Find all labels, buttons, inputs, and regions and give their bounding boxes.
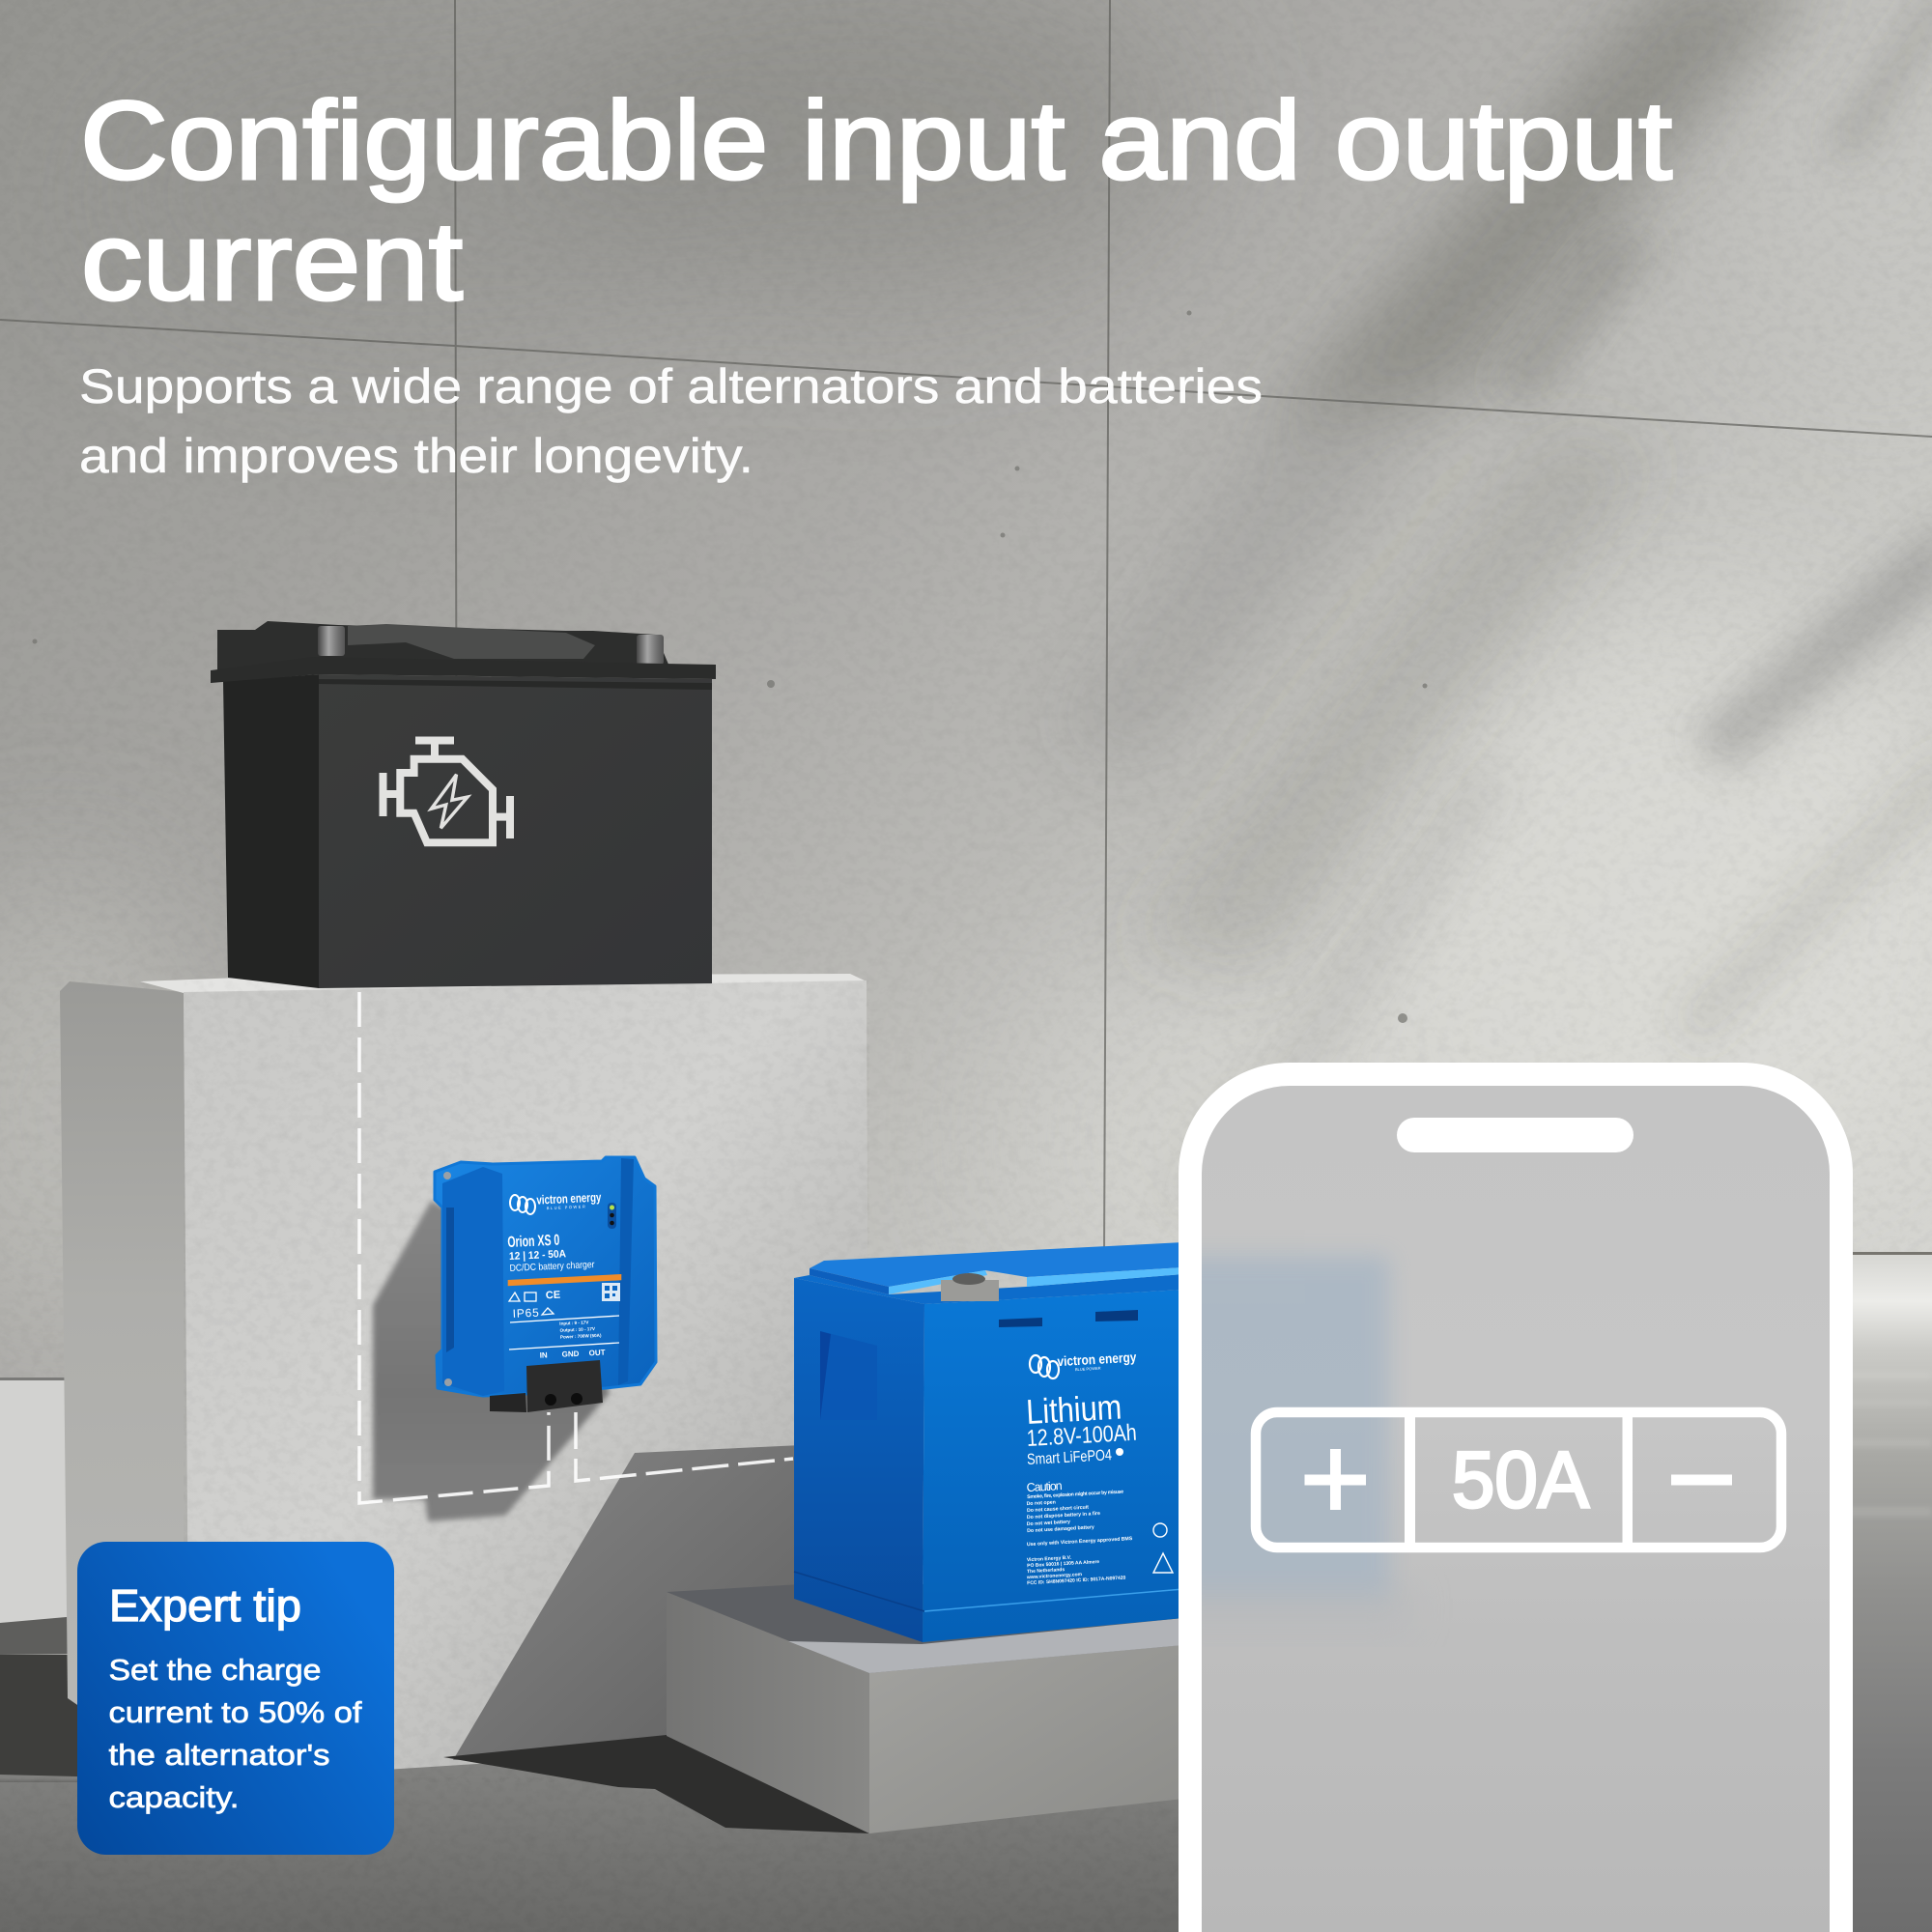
current value: 50A: [1452, 1435, 1590, 1524]
step top: [667, 1584, 1183, 1673]
terminal: [941, 1273, 999, 1301]
base lines: [924, 1589, 1183, 1611]
lithium labels: PO Box 50016 | 1305 AA Almere: [1027, 1559, 1100, 1569]
lid highlights: [889, 1270, 987, 1294]
title: Configurable input and output: [80, 79, 1672, 203]
concrete texture: [0, 0, 1932, 1391]
subtitle: Supports a wide range of alternators and batteries: [79, 359, 1263, 413]
charger labels: [505, 1190, 609, 1361]
car starter battery: [211, 621, 716, 988]
lithium labels: Victron Energy B.V.: [1027, 1555, 1072, 1563]
phone mockup: [1159, 1074, 1841, 1932]
lithium battery left side: [794, 1278, 924, 1642]
battery rim: [794, 1274, 1183, 1304]
lithium labels: FCC ID: SH8N097420 IC ID: 9017A-N097420: [1027, 1576, 1126, 1586]
battery top mouldings: [217, 621, 669, 671]
charger labels: IN: [540, 1350, 548, 1360]
battery terminals: [318, 626, 345, 656]
charger labels: OUT: [588, 1349, 606, 1357]
lithium labels: Smart LiFePO4: [1027, 1447, 1113, 1468]
LED panel: [608, 1203, 616, 1229]
lithium labels: Do not use damaged battery: [1027, 1524, 1094, 1534]
tip text: the alternator's: [108, 1738, 330, 1772]
slots: [999, 1318, 1042, 1327]
tip text: Set the charge: [108, 1653, 321, 1687]
tip text: capacity.: [108, 1780, 240, 1814]
subtitle: and improves their longevity.: [79, 429, 753, 483]
charger logo coil: [510, 1195, 535, 1214]
charger labels: Power : 700W (50A): [560, 1333, 602, 1340]
charger labels: Input : 9 - 17V: [559, 1320, 589, 1326]
plinth left face: [60, 981, 189, 1782]
certification icons: [1153, 1523, 1173, 1573]
screws: [443, 1172, 451, 1179]
floor shadow: [443, 1734, 869, 1833]
charger right strap: [618, 1158, 634, 1385]
charger labels: DC/DC battery charger: [509, 1260, 595, 1274]
charger labels: CE: [546, 1290, 560, 1301]
phone outline: [1190, 1074, 1841, 1932]
charger labels: 12 | 12 - 50A: [509, 1248, 566, 1263]
lithium labels: www.victronenergy.com: [1026, 1572, 1083, 1580]
lithium battery front: [923, 1290, 1183, 1642]
title: current: [81, 200, 463, 324]
minus button: [1671, 1474, 1732, 1486]
charger body: [435, 1157, 656, 1396]
wall shadow streaks: [0, 0, 1932, 1352]
lithium labels: victron energy: [1057, 1350, 1137, 1369]
icon: engine with lightning bolt: [383, 740, 510, 842]
orange band: [508, 1274, 621, 1286]
lithium labels: Use only with Victron Energy approved BMS: [1027, 1536, 1133, 1548]
lithium labels: Lithium: [1025, 1387, 1122, 1432]
lithium logo coil: [1030, 1355, 1059, 1378]
lithium labels: Do not dispose battery in a fire: [1027, 1511, 1100, 1520]
warning icons: [509, 1293, 554, 1315]
charger left moulding: [442, 1167, 504, 1396]
plinth top surface: [140, 974, 867, 993]
title: [80, 79, 1672, 324]
lithium labels: Do not open: [1026, 1499, 1056, 1507]
plinth: [60, 974, 869, 1782]
lithium labels: Caution: [1026, 1479, 1063, 1494]
lithium labels: The Netherlands: [1027, 1567, 1065, 1575]
panel seams: [0, 0, 1932, 1256]
floor and left wall base: [0, 1252, 1932, 1932]
subtitle: [79, 359, 1263, 483]
lithium labels: 12.8V-100Ah: [1026, 1420, 1137, 1452]
lithium labels: Smoke, fire, explosion might occur by misuse: [1027, 1490, 1123, 1500]
phone glass: [1159, 1074, 1841, 1932]
phone notch: [1397, 1118, 1634, 1152]
lithium battery lid: [810, 1242, 1183, 1287]
battery lid rim: [211, 657, 716, 683]
floor texture: [0, 1777, 1198, 1932]
step left face: [667, 1592, 869, 1833]
lithium labels: Do not wet battery: [1027, 1520, 1070, 1527]
charger labels: BLUE POWER: [547, 1204, 585, 1210]
step front face: [869, 1645, 1183, 1833]
plus button: [1304, 1449, 1366, 1510]
charger labels: Orion XS 0: [507, 1233, 560, 1251]
step block: [667, 1584, 1183, 1833]
battery front: [319, 674, 712, 988]
cast shadow of the Orion charger: [373, 1201, 610, 1521]
charger labels: GND: [561, 1350, 580, 1359]
callout: expert tip: [77, 1542, 394, 1855]
charger labels: victron energy: [536, 1190, 602, 1208]
wiring diagram dashed lines: [359, 992, 793, 1503]
lithium labels: [1013, 1350, 1149, 1586]
bluetooth badge: [1116, 1448, 1123, 1456]
tip text: [108, 1653, 362, 1814]
charger labels: Output : 10 - 17V: [559, 1326, 596, 1333]
battery left side: [223, 674, 320, 988]
handle recess: [820, 1331, 877, 1420]
lithium labels: BLUE POWER: [1075, 1366, 1101, 1372]
tip heading: Expert tip: [109, 1580, 301, 1631]
wall pits: [33, 311, 1428, 1023]
cast shadow of the lithium battery: [453, 1445, 802, 1760]
plinth texture: [184, 980, 869, 1782]
Orion XS DC/DC charger: [435, 1157, 656, 1412]
divider lines: [509, 1316, 619, 1350]
QR code: [602, 1283, 620, 1301]
right side floor: [1835, 1252, 1932, 1932]
charger labels: IP65: [512, 1306, 539, 1321]
plinth front face: [184, 980, 869, 1782]
battery handle: [348, 624, 595, 659]
connector cover: [490, 1360, 603, 1412]
tip text: current to 50% of: [108, 1695, 362, 1729]
lithium labels: Do not cause short circuit: [1027, 1505, 1089, 1514]
current control: [1256, 1410, 1781, 1549]
lithium battery: [794, 1242, 1183, 1642]
